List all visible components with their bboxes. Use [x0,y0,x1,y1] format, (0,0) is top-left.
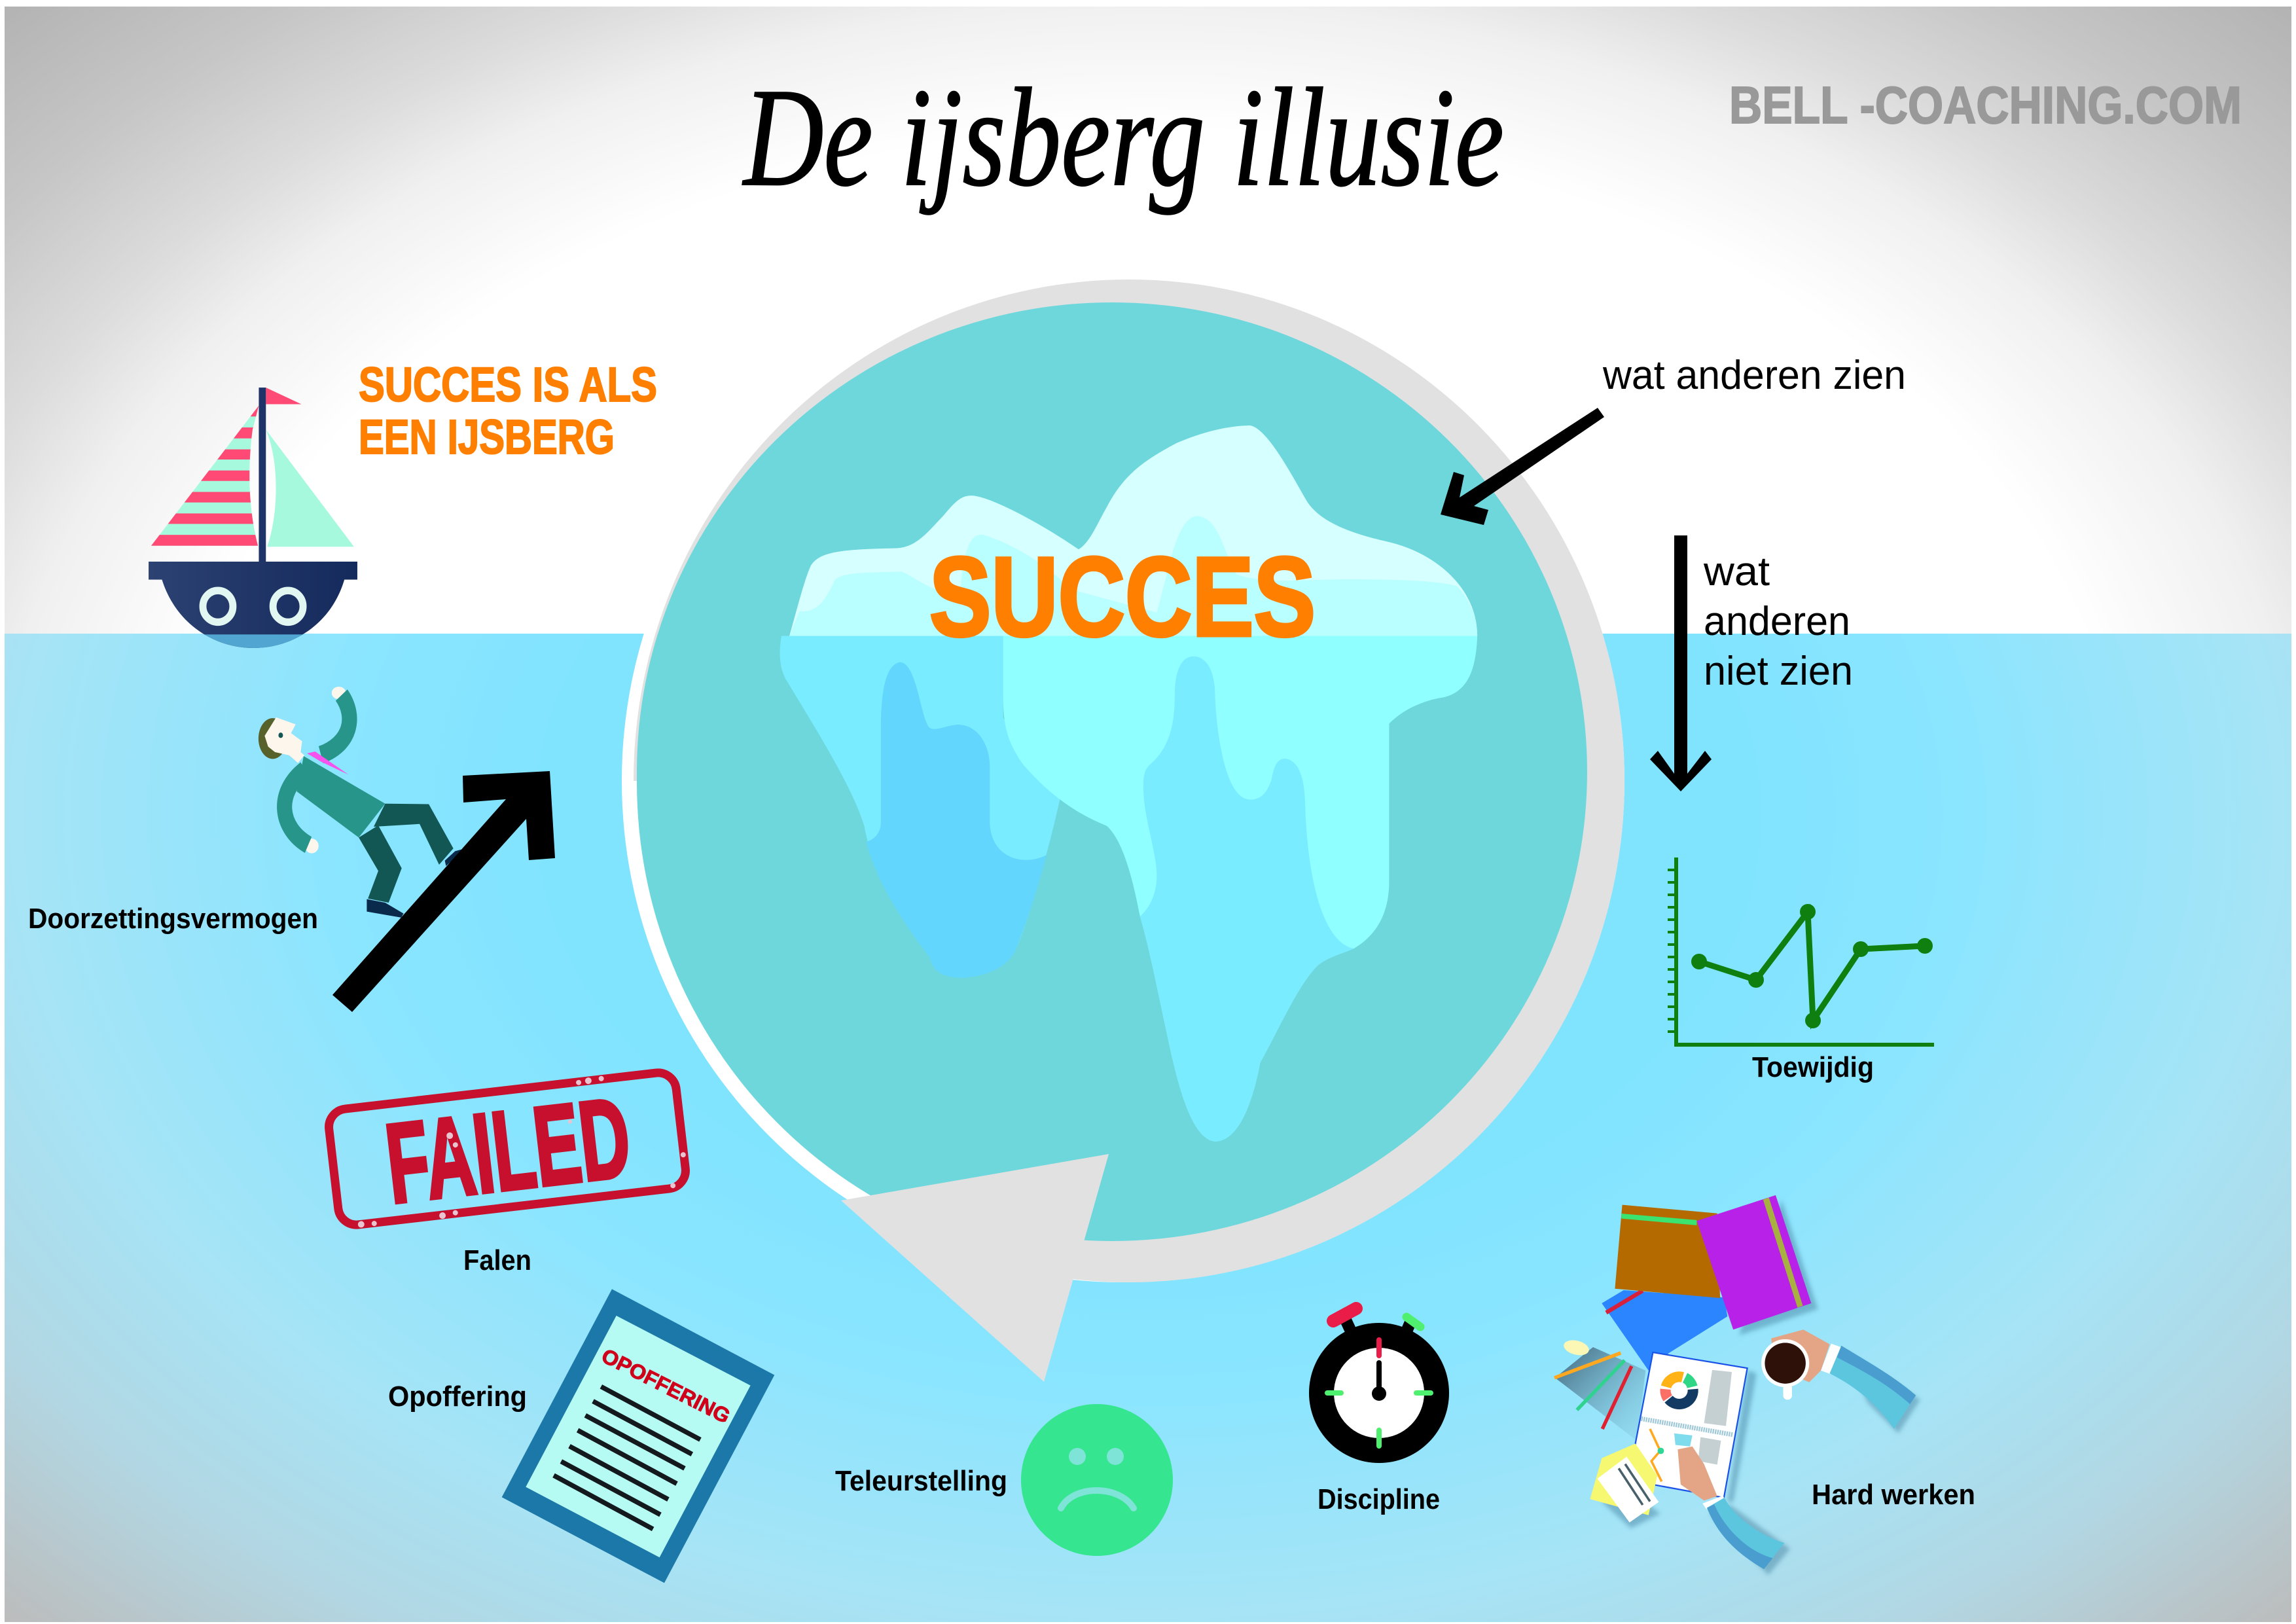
lower sleeve [1707,1498,1784,1569]
shoes [367,848,465,918]
buttons [1333,1308,1356,1321]
report bars [1704,1370,1732,1426]
arrow: diagonal up [332,771,555,1012]
flag [266,388,301,405]
case [1309,1323,1449,1463]
white outer ring [622,280,1624,1282]
iceberg underwater right [1003,636,1477,1142]
soft shadows [1602,1200,1920,1575]
label: wat anderen zien: wat anderen zien [1602,353,1906,398]
cup [1761,1339,1809,1387]
heading: succes is als een ijsberg [359,357,657,464]
illustration: climbing man [259,687,465,918]
pencils [1554,1353,1632,1429]
hands [305,687,346,854]
heading: succes is als een ijsberg: EEN IJSBERG [359,410,615,464]
label: discipline: Discipline [1318,1483,1440,1515]
mast [259,388,266,563]
submerged part of hull [204,634,303,648]
label: wat anderen niet zien [1703,549,1853,694]
icon: sailboat [142,388,357,648]
data line [1699,912,1925,1020]
face [264,717,304,763]
hair [259,718,287,759]
document lines [554,1386,700,1529]
chart: toewijding line chart [1668,857,1934,1045]
illustration: desk with notebooks and hands [1554,1195,1920,1575]
label: wat anderen niet zien: anderen [1704,599,1850,644]
label: teleurstelling: Teleurstelling [835,1465,1007,1497]
upper cuff [1821,1344,1840,1374]
lower hand [1677,1447,1717,1500]
data points [1691,904,1933,1028]
heading: succes is als een ijsberg: SUCCES IS ALS [359,357,657,412]
ticks [1376,1340,1382,1356]
donut chart [1666,1377,1693,1404]
iceberg top [789,425,1477,636]
button stems [1344,1316,1410,1335]
pencil shadow [1555,1347,1645,1441]
right sail [266,429,354,547]
brown notebook [1615,1205,1720,1298]
arrow: down [1650,535,1712,791]
label: wat anderen niet zien: niet zien [1704,649,1853,694]
icon: stopwatch [1309,1308,1449,1463]
cup handle [1784,1384,1792,1399]
axes [1676,857,1934,1045]
document frame [502,1289,774,1583]
label: falen: Falen [463,1244,531,1276]
lower cuff [1702,1496,1725,1509]
purple notebook [1696,1195,1811,1329]
label: opoffering: Opoffering [388,1380,527,1413]
report line chart [1650,1429,1662,1481]
eye [278,732,283,738]
stamp word: FAILED [380,1074,636,1227]
iceberg [780,425,1477,1142]
hand [1376,1363,1382,1391]
arrowhead of ring [841,1154,1109,1382]
label: toewijdig: Toewijdig [1752,1051,1874,1083]
teal sea disc [637,302,1587,1262]
stamp border [327,1071,687,1227]
document title: OPOFFERING [598,1344,734,1428]
icon: sad face [1021,1404,1173,1556]
arrow: to iceberg top [1441,408,1604,525]
blue notebook [1602,1290,1727,1371]
iceberg underwater left [780,636,1060,978]
iceberg underwater left dark [866,662,1047,978]
heading: succes: SUCCES [929,534,1316,660]
tie [307,751,348,774]
panel: iceberg circle [622,280,1624,1382]
iceberg underwater right shade [1140,657,1354,1142]
background: sky [5,7,2291,634]
label: hard werken: Hard werken [1812,1479,1975,1511]
spiral binding [1641,1418,1733,1435]
torso [296,756,385,838]
legs [359,804,454,903]
stamp: failed [327,1068,691,1233]
label: doorzettingsvermogen: Doorzettingsvermogen [28,903,318,935]
background: water [5,634,2291,1622]
document sheet [526,1316,751,1557]
title: De ijsberg illusie [742,59,1504,215]
eraser [1562,1338,1590,1358]
portholes [203,590,303,622]
upper hand [1771,1329,1830,1382]
arms [285,695,350,845]
grey ring [634,280,1624,1282]
hull [149,562,357,648]
sticky notes [1590,1443,1657,1515]
dial [1334,1348,1424,1438]
upper sleeve [1830,1346,1916,1429]
label: wat anderen niet zien: wat [1703,549,1770,594]
report [1636,1352,1748,1498]
iceberg top shade [789,516,1477,636]
icon: opoffering document [502,1289,774,1583]
left striped sail [151,406,259,546]
